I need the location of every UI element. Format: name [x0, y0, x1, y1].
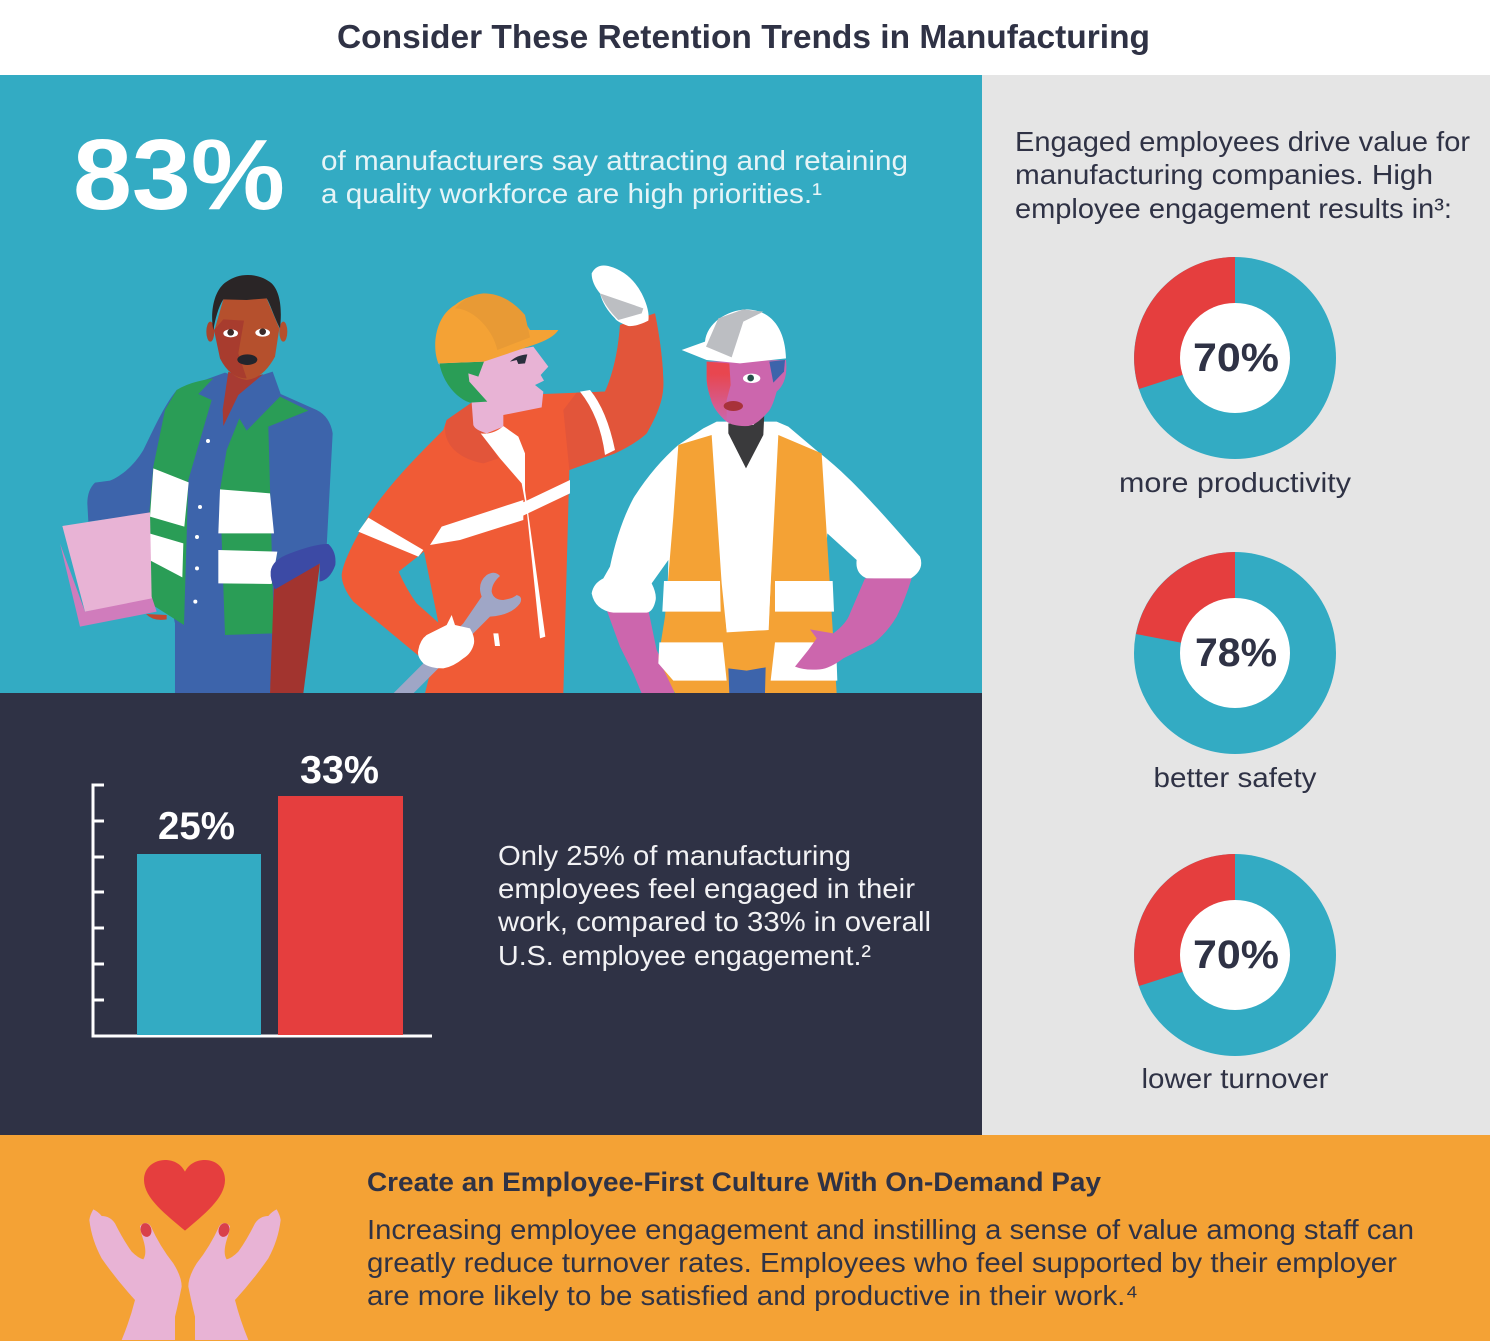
panel: teal statistic and workers — [0, 75, 982, 693]
heading: on-demand pay: Create an Employee-First Culture With On-Demand Pay — [367, 1167, 1101, 1197]
worker: man with clipboard — [60, 275, 336, 693]
worker: woman with white helmet and orange vest — [592, 309, 921, 693]
text: engagement comparison: work, compared to 33% in overall — [497, 906, 931, 937]
text: on-demand pay body: are more likely to be satisfied and productive in their work.⁴ — [367, 1280, 1138, 1311]
panel: orange on-demand pay callout — [0, 1135, 1490, 1341]
donut chart: 70% lower turnover: 70% — [1193, 933, 1279, 977]
donut chart: 70% lower turnover: lower turnover — [1142, 1063, 1328, 1094]
text: engaged employees intro — [1015, 126, 1470, 224]
text: workforce priorities: a quality workforce are high priorities.¹ — [321, 178, 822, 209]
bar chart: engagement: 33% — [300, 749, 379, 792]
donut chart: 70% more productivity: 70% — [1193, 336, 1279, 380]
text: on-demand pay body: Increasing employee engagement and instilling a sense of value among staff can — [367, 1214, 1414, 1245]
icon: hands holding heart — [89, 1160, 281, 1340]
donut chart: 70% more productivity — [1119, 257, 1351, 498]
donut chart: 78% better safety — [1134, 552, 1336, 793]
panel: gray engagement results — [982, 75, 1490, 1135]
text: engaged employees intro: employee engagement results in³: — [1015, 193, 1452, 224]
donut chart: 78% better safety: better safety — [1154, 762, 1316, 793]
text: engagement comparison: U.S. employee engagement.² — [498, 940, 871, 971]
text: engaged employees intro: manufacturing companies. High — [1015, 159, 1433, 190]
panel: navy engagement comparison — [0, 693, 982, 1135]
worker: man with wrench and orange helmet — [342, 265, 663, 693]
text: workforce priorities — [321, 145, 908, 209]
bar chart: engagement: 25% — [158, 805, 235, 848]
text: on-demand pay body — [367, 1214, 1414, 1311]
title: Consider These Retention Trends in Manufacturing — [337, 18, 1150, 55]
illustration: three workers — [60, 265, 921, 693]
bar chart: engagement — [93, 749, 432, 1036]
text: on-demand pay body: greatly reduce turnover rates. Employees who feel supported by their employer — [367, 1247, 1397, 1278]
statistic: 83%: 83% — [73, 119, 285, 231]
text: engagement comparison: employees feel engaged in their — [498, 873, 915, 904]
donut chart: 78% better safety: 78% — [1195, 631, 1277, 675]
text: engagement comparison — [497, 840, 931, 971]
donut chart: 70% more productivity: more productivity — [1119, 467, 1351, 498]
text: workforce priorities: of manufacturers say attracting and retaining — [321, 145, 908, 176]
text: engagement comparison: Only 25% of manufacturing — [498, 840, 851, 871]
text: engaged employees intro: Engaged employees drive value for — [1015, 126, 1470, 157]
donut chart: 70% lower turnover — [1134, 854, 1336, 1094]
